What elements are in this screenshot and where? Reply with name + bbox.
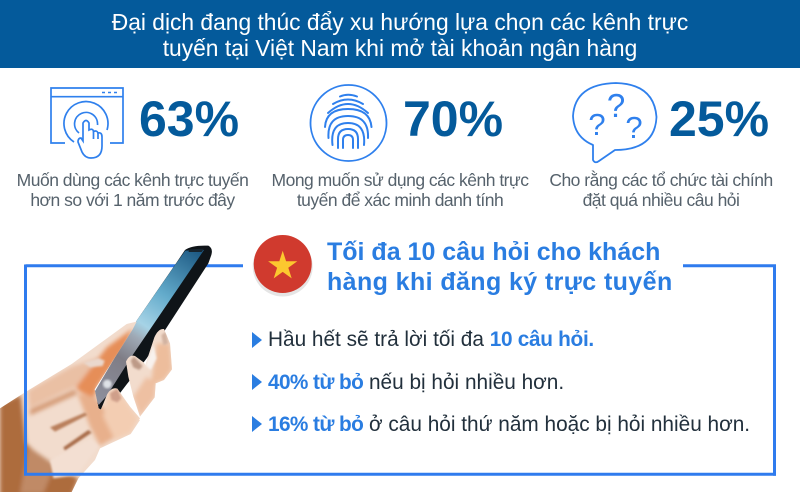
icon: question speech bubble: ? [625, 110, 643, 145]
caption: 25%: đặt quá nhiều câu hỏi [583, 190, 739, 210]
arrow 2 [252, 374, 262, 390]
bullet 1: Hầu hết sẽ trả lời tối đa 10 câu hỏi. [268, 328, 594, 351]
arrow 1 [252, 332, 262, 348]
header banner: tuyến tại Việt Nam khi mở tài khoản ngân hàng [163, 34, 637, 60]
caption: 63% [17, 170, 248, 210]
caption: 70% [272, 170, 528, 210]
stat: 25%: 25% [669, 91, 769, 147]
caption: 63%: hơn so với 1 năm trước đây [30, 190, 235, 210]
caption: 70%: Mong muốn sử dụng các kênh trực [272, 170, 528, 190]
caption: 70%: tuyến để xác minh danh tính [297, 190, 503, 210]
hand [0, 322, 172, 492]
panel heading [327, 238, 673, 296]
panel heading: Tối đa 10 câu hỏi cho khách [327, 238, 660, 266]
caption: 63%: Muốn dùng các kênh trực tuyến [17, 170, 248, 190]
panel heading: hàng khi đăng ký trực tuyến [327, 268, 673, 296]
phone [94, 246, 212, 410]
icon: fingerprint [310, 84, 388, 162]
caption: 25% [549, 170, 773, 210]
bullet 3: 16% từ bỏ ở câu hỏi thứ năm hoặc bị hỏi nhiều hơn. [268, 413, 750, 436]
caption: 25%: Cho rằng các tổ chức tài chính [549, 170, 773, 190]
stat: 70%: 70% [403, 91, 503, 147]
header banner: Đại dịch đang thúc đẩy xu hướng lựa chọn các kênh trực [112, 8, 688, 34]
icon: question speech bubble: ? [588, 107, 606, 142]
header banner [0, 0, 800, 68]
stat: 63%: 63% [139, 91, 239, 147]
icon: question speech bubble: ? [607, 87, 625, 124]
arrow 3 [252, 416, 262, 432]
icon: question speech bubble [572, 82, 658, 164]
flag badge [252, 235, 313, 296]
icon: browser click [50, 87, 124, 159]
photo: hand holding phone [0, 246, 212, 492]
bullet 2: 40% từ bỏ nếu bị hỏi nhiều hơn. [268, 371, 564, 394]
